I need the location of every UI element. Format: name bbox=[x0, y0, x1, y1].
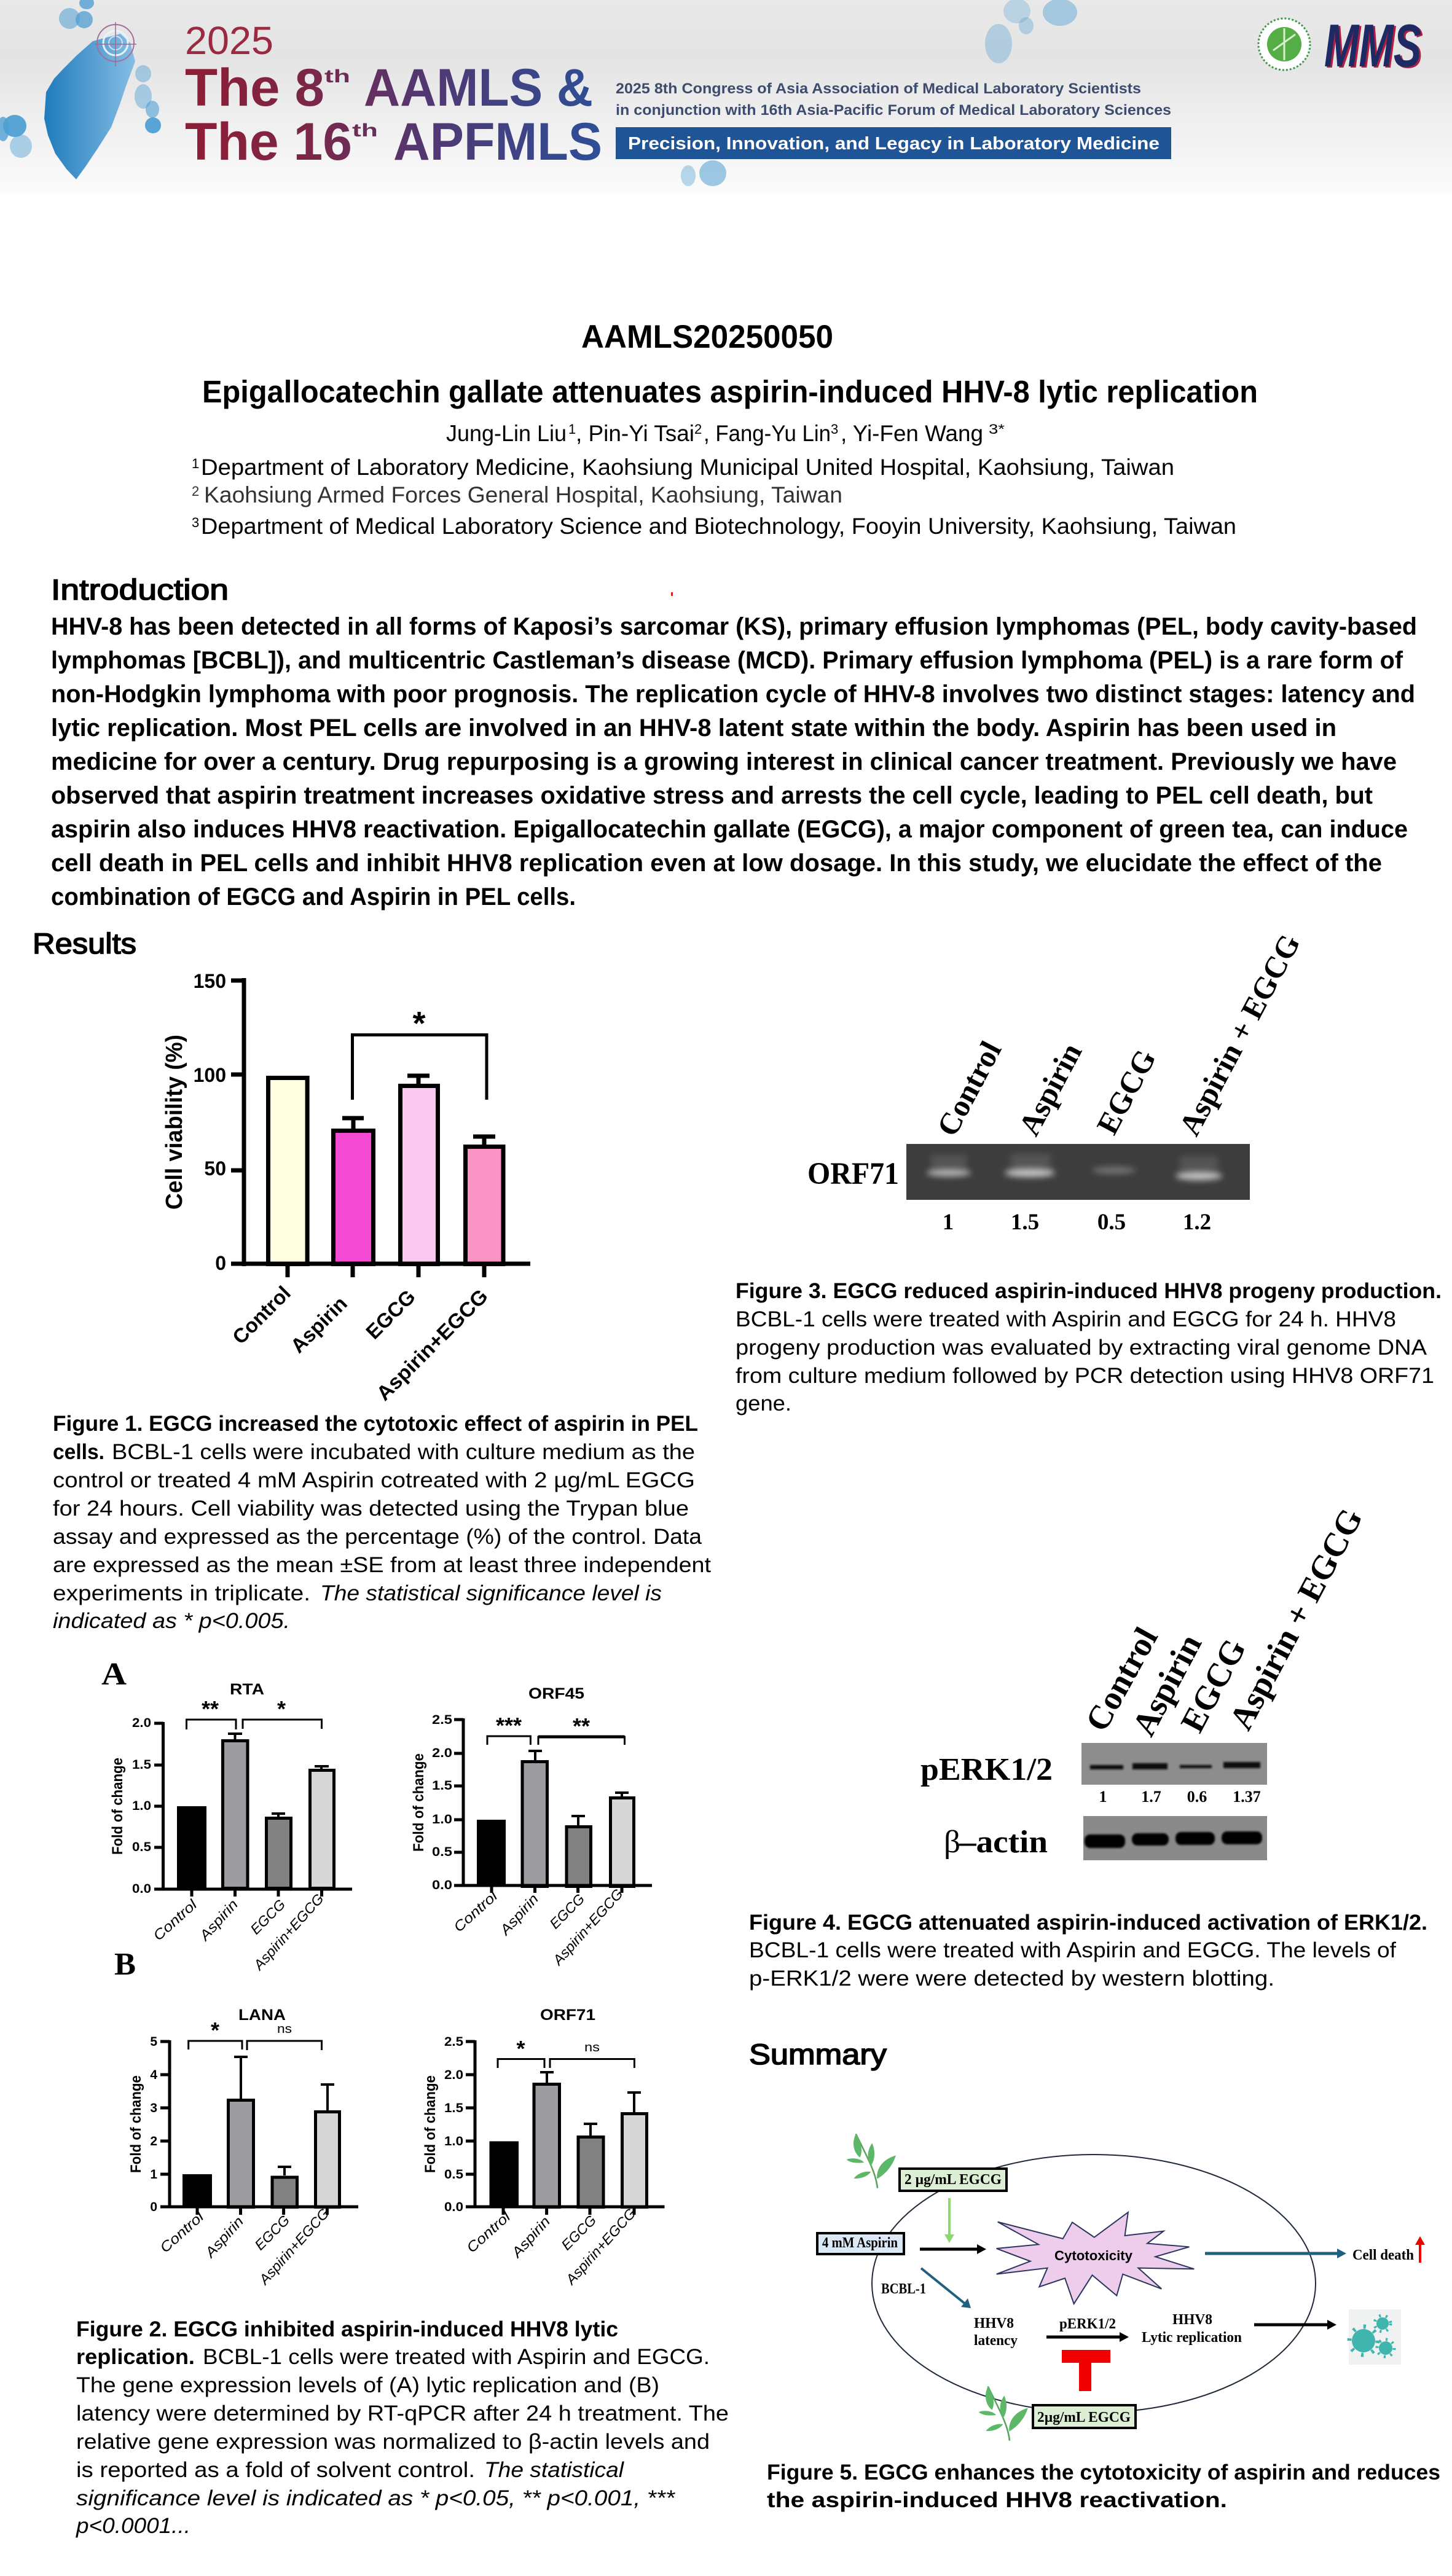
chart: ORF45: Aspirin bbox=[496, 1890, 541, 1939]
lane labels: EGCG bbox=[1173, 1632, 1253, 1738]
theme bar: Precision, Innovation, and Legacy in Laboratory Medicine bbox=[628, 134, 1160, 154]
chart: ORF45: Fold of change bbox=[410, 1753, 427, 1852]
inhibition symbol bbox=[1062, 2350, 1110, 2391]
chart: LANA: 0 bbox=[150, 2200, 157, 2214]
heading line two bbox=[185, 112, 602, 171]
figure 3 caption: from culture medium followed by PCR detection using HHV8 ORF71 bbox=[736, 1364, 1434, 1388]
authors bbox=[446, 421, 1005, 446]
chart: ORF71: 2.0 bbox=[444, 2068, 463, 2082]
chart: ORF71: EGCG bbox=[558, 2212, 599, 2253]
chart: ORF71: 1.0 bbox=[444, 2134, 463, 2148]
figure 3 gel bbox=[807, 928, 1307, 1235]
figure 2 caption bbox=[76, 2317, 729, 2538]
x labels: Control bbox=[228, 1282, 295, 1349]
icon: virions bbox=[1349, 2309, 1401, 2365]
chart: LANA: Fold of change bbox=[128, 2075, 144, 2173]
authors: , Fang-Yu Lin bbox=[704, 421, 831, 446]
lane labels: Aspirin + EGCG bbox=[1172, 928, 1307, 1141]
chart: ORF45: ORF45 bbox=[528, 1685, 584, 1702]
introduction text: combination of EGCG and Aspirin in PEL cells. bbox=[51, 883, 576, 910]
densitometry values: 1.7 bbox=[1141, 1788, 1161, 1806]
authors: 3* bbox=[989, 421, 1005, 437]
chart: RTA: Aspirin+EGCG bbox=[249, 1890, 327, 1974]
figure 2 caption: latency were determined by RT-qPCR after 24 h treatment. The bbox=[76, 2402, 729, 2425]
authors: , Yi-Fen Wang bbox=[841, 421, 983, 446]
introduction text: HHV-8 has been detected in all forms of Kaposi’s sarcomar (KS), primary effusion lymphomas (PEL, body cavity-based bbox=[51, 613, 1417, 640]
figure 1 caption: experiments in triplicate. bbox=[53, 1581, 310, 1605]
box: EGCG dose bottom: 2µg/mL EGCG bbox=[1037, 2410, 1131, 2425]
chart: ORF71: Control bbox=[463, 2208, 514, 2256]
chart: ORF71: 1.5 bbox=[444, 2101, 463, 2115]
figure 1 caption: are expressed as the mean ±SE from at least three independent bbox=[53, 1553, 711, 1577]
significance bracket bbox=[353, 1035, 487, 1100]
lane labels: Control bbox=[930, 1035, 1008, 1141]
x labels: EGCG bbox=[361, 1285, 420, 1344]
lane labels: Control bbox=[1078, 1621, 1165, 1737]
chart: ORF45: Aspirin+EGCG bbox=[549, 1885, 626, 1969]
lane labels bbox=[1078, 1502, 1370, 1742]
introduction text: observed that aspirin treatment increases oxidative stress and arrests the cell cycle, leading to PEL cell death, but bbox=[51, 782, 1373, 809]
heading line two: th bbox=[352, 120, 378, 141]
arrow: latency to lytic replication bbox=[1046, 2332, 1129, 2342]
icon: red up arrow bbox=[1415, 2236, 1425, 2263]
chart: LANA: LANA bbox=[238, 2006, 286, 2024]
figure 3 caption bbox=[736, 1279, 1442, 1415]
figure 3 caption: gene. bbox=[736, 1392, 791, 1415]
heading line two: The 16 bbox=[185, 112, 352, 171]
chart: ORF71: ORF71 bbox=[540, 2006, 595, 2024]
y tick labels: 100 bbox=[194, 1064, 226, 1086]
heading line one: th bbox=[324, 66, 350, 87]
summary heading: Summary bbox=[749, 2038, 887, 2070]
chart: LANA: * bbox=[211, 2018, 219, 2043]
introduction text: aspirin also induces HHV8 reactivation. Epigallocatechin gallate (EGCG), a major component of green tea, can induce bbox=[51, 816, 1408, 843]
affiliations bbox=[192, 455, 1236, 539]
cell outline bbox=[872, 2155, 1316, 2413]
chart: RTA: * bbox=[277, 1696, 286, 1721]
chart: ORF45: 0.0 bbox=[432, 1878, 452, 1892]
introduction text: medicine for over a century. Drug repurposing is a growing interest in clinical cancer treatment. Previously we have bbox=[51, 748, 1397, 775]
chart: ORF45: 1.0 bbox=[432, 1812, 452, 1826]
chart: RTA: Aspirin bbox=[195, 1896, 241, 1944]
pERK blot bbox=[1081, 1743, 1267, 1785]
chart: ORF71: 0.5 bbox=[444, 2167, 463, 2182]
figure 2 caption: relative gene expression was normalized to β-actin levels and bbox=[76, 2430, 710, 2454]
figure 1 caption: indicated as * p<0.005. bbox=[53, 1609, 290, 1633]
abstract number: AAMLS20250050 bbox=[581, 319, 833, 355]
target rings bbox=[95, 22, 136, 66]
box: aspirin dose: 4 mM Aspirin bbox=[822, 2235, 898, 2251]
chart: LANA: 5 bbox=[150, 2035, 157, 2049]
authors: 3 bbox=[831, 421, 838, 437]
conference banner bbox=[0, 0, 1452, 192]
chart: RTA: 0.5 bbox=[132, 1840, 151, 1854]
logo: society seal bbox=[1258, 18, 1310, 70]
densitometry values: 1 bbox=[943, 1210, 954, 1235]
figure 5 summary diagram bbox=[817, 2134, 1425, 2441]
chart: LANA: 1 bbox=[150, 2167, 157, 2182]
gene label: ORF71 bbox=[807, 1157, 899, 1191]
map of Taiwan bbox=[44, 34, 135, 179]
starburst: cytotoxicity bbox=[997, 2212, 1194, 2304]
congress subtitle: in conjunction with 16th Asia-Pacific Forum of Medical Laboratory Sciences bbox=[616, 102, 1171, 119]
chart: ORF71: Aspirin+EGCG bbox=[562, 2205, 639, 2288]
chart: RTA: 0.0 bbox=[132, 1882, 151, 1896]
arrow: cytotoxicity to cell death bbox=[1205, 2249, 1346, 2258]
chart: RTA: RTA bbox=[230, 1681, 264, 1698]
chart: LANA: 4 bbox=[150, 2068, 157, 2082]
densitometry values: 1.5 bbox=[1011, 1210, 1039, 1235]
x labels: Aspirin+EGCG bbox=[372, 1285, 492, 1405]
diagram labels: BCBL-1 bbox=[881, 2281, 926, 2297]
chart: ORF71 bbox=[422, 2006, 665, 2288]
figure 2 caption: Figure 2. EGCG inhibited aspirin-induced HHV8 lytic bbox=[76, 2317, 618, 2341]
chart: LANA: Control bbox=[157, 2208, 207, 2256]
figure 2 caption: The gene expression levels of (A) lytic replication and (B) bbox=[76, 2373, 659, 2397]
chart: RTA bbox=[109, 1681, 352, 1974]
arrow: aspirin to latency bbox=[921, 2268, 971, 2308]
x labels bbox=[228, 1282, 492, 1405]
icon: tea leaves top bbox=[847, 2134, 896, 2188]
chart: RTA: 2.0 bbox=[132, 1716, 151, 1730]
icon: tea leaves bottom bbox=[979, 2386, 1028, 2441]
congress subtitle bbox=[616, 80, 1171, 119]
figure 4 caption bbox=[749, 1911, 1427, 1991]
gel image bbox=[906, 1144, 1250, 1200]
figure 2 caption: The statistical bbox=[484, 2458, 624, 2482]
chart: ORF71: 2.5 bbox=[444, 2035, 463, 2049]
figure 3 caption: BCBL-1 cells were treated with Aspirin and EGCG for 24 h. HHV8 bbox=[736, 1307, 1396, 1331]
figure 1 caption: control or treated 4 mM Aspirin cotreated with 2 µg/mL EGCG bbox=[53, 1468, 695, 1492]
densitometry values: 1.37 bbox=[1233, 1788, 1261, 1806]
chart: RTA: EGCG bbox=[247, 1896, 288, 1938]
introduction heading: Introduction bbox=[51, 573, 229, 606]
chart: ORF45: Control bbox=[450, 1887, 501, 1935]
panel label B: B bbox=[114, 1947, 136, 1982]
figure 5 caption: the aspirin-induced HHV8 reactivation. bbox=[767, 2488, 1227, 2512]
figure 4 caption: BCBL-1 cells were treated with Aspirin and EGCG. The levels of bbox=[749, 1938, 1396, 1962]
starburst: cytotoxicity: Cytotoxicity bbox=[1054, 2248, 1133, 2263]
figure 1 chart: cell viability: * bbox=[412, 1005, 426, 1042]
authors: , Pin-Yi Tsai bbox=[576, 421, 694, 446]
chart: LANA: 3 bbox=[150, 2101, 157, 2115]
figure 2 caption: replication. bbox=[76, 2345, 195, 2369]
figure 4 western blot: β bbox=[944, 1825, 960, 1860]
figure 2 caption: is reported as a fold of solvent control. bbox=[76, 2458, 475, 2482]
bands bbox=[927, 1167, 1222, 1180]
figure 2 caption: p<0.0001... bbox=[76, 2514, 190, 2538]
chart: ORF71: ns bbox=[584, 2041, 600, 2054]
affiliations: 1 bbox=[192, 456, 199, 471]
y tick labels bbox=[194, 970, 226, 1274]
x labels: Aspirin bbox=[286, 1292, 351, 1357]
box: aspirin dose bbox=[817, 2233, 904, 2254]
box: EGCG dose top bbox=[900, 2169, 1007, 2191]
arrow: EGCG to cytotoxicity bbox=[944, 2198, 954, 2243]
authors: Jung-Lin Liu bbox=[446, 421, 567, 446]
figure 4 western blot: –actin bbox=[959, 1825, 1048, 1860]
figure 4 caption: p-ERK1/2 were were detected by western blotting. bbox=[749, 1967, 1274, 1991]
chart: ORF45: *** bbox=[496, 1713, 522, 1738]
densitometry values: 1.2 bbox=[1183, 1210, 1211, 1235]
introduction text: lymphomas [BCBL]), and multicentric Castleman’s disease (MCD). Primary effusion lymphoma (PEL) is a rare form of bbox=[51, 647, 1403, 674]
poster title: Epigallocatechin gallate attenuates aspirin-induced HHV-8 lytic replication bbox=[202, 374, 1258, 409]
figure 5 caption bbox=[767, 2461, 1440, 2512]
heading line two: APFMLS bbox=[393, 112, 602, 171]
chart: RTA: 1.5 bbox=[132, 1758, 151, 1772]
decorative molecules bbox=[0, 0, 1077, 186]
y tick labels: 0 bbox=[215, 1252, 226, 1274]
chart: LANA: Aspirin bbox=[201, 2213, 246, 2261]
heading line one: The 8 bbox=[185, 58, 324, 117]
diagram labels: Lytic replication bbox=[1142, 2330, 1242, 2346]
chart: ORF71: * bbox=[516, 2036, 525, 2061]
theme bar bbox=[616, 127, 1171, 159]
arrow: lytic replication to virions bbox=[1254, 2320, 1336, 2330]
lane labels bbox=[930, 928, 1307, 1141]
axes bbox=[231, 978, 530, 1277]
chart: ORF45 bbox=[410, 1685, 652, 1969]
box: EGCG dose top: 2 µg/mL EGCG bbox=[905, 2172, 1002, 2188]
y tick labels: 50 bbox=[204, 1157, 226, 1180]
chart: RTA: Control bbox=[150, 1896, 200, 1944]
authors: 2 bbox=[694, 421, 702, 437]
chart: ORF71: Aspirin bbox=[508, 2213, 553, 2261]
figure 1 caption bbox=[53, 1412, 711, 1633]
chart: RTA: 1.0 bbox=[132, 1799, 151, 1813]
affiliations: Department of Medical Laboratory Science and Biotechnology, Fooyin University, Kaohsiung, Taiwan bbox=[201, 514, 1236, 539]
introduction text: non-Hodgkin lymphoma with poor prognosis. The replication cycle of HHV-8 involves two distinct stages: latency and bbox=[51, 681, 1415, 708]
y axis title: Cell viability (%) bbox=[162, 1035, 187, 1210]
chart: LANA: ns bbox=[277, 2022, 292, 2036]
chart: LANA: Aspirin+EGCG bbox=[255, 2205, 332, 2288]
results heading: Results bbox=[33, 927, 136, 960]
densitometry values: 0.5 bbox=[1097, 1210, 1126, 1235]
chart: ORF45: 2.0 bbox=[432, 1746, 452, 1760]
densitometry values: 1 bbox=[1099, 1788, 1107, 1806]
chart: RTA: ** bbox=[202, 1696, 219, 1721]
figure 1 caption: assay and expressed as the percentage (%) of the control. Data bbox=[53, 1525, 702, 1549]
lane labels: EGCG bbox=[1089, 1044, 1163, 1140]
heading line one bbox=[185, 58, 593, 117]
figure 2 caption: BCBL-1 cells were treated with Aspirin and EGCG. bbox=[203, 2345, 710, 2369]
chart: ORF45: ** bbox=[573, 1713, 590, 1739]
figure 3 caption: progeny production was evaluated by extracting viral genome DNA bbox=[736, 1336, 1427, 1360]
chart: LANA bbox=[128, 2006, 358, 2288]
panel label A: A bbox=[101, 1657, 127, 1692]
chart: ORF71: 0.0 bbox=[444, 2200, 463, 2214]
diagram labels: HHV8 bbox=[1172, 2312, 1212, 2328]
lane labels: Aspirin bbox=[1124, 1628, 1209, 1742]
figure 1 caption: The statistical significance level is bbox=[320, 1581, 662, 1605]
figure 1 caption: cells. bbox=[53, 1440, 104, 1464]
introduction text: cell death in PEL cells and inhibit HHV8 replication even at low dosage. In this study, we elucidate the effect of the bbox=[51, 850, 1382, 877]
bars bbox=[268, 1078, 503, 1264]
y tick labels: 150 bbox=[194, 970, 226, 992]
affiliations: 3 bbox=[192, 515, 199, 530]
diagram labels: Cell death bbox=[1352, 2247, 1414, 2263]
figure 3 caption: Figure 3. EGCG reduced aspirin-induced HHV8 progeny production. bbox=[736, 1279, 1442, 1303]
year: 2025 bbox=[185, 18, 273, 63]
chart: ORF45: 2.5 bbox=[432, 1713, 452, 1727]
introduction text: lytic replication. Most PEL cells are involved in an HHV-8 latent state within the body. Aspirin has been used in bbox=[51, 714, 1336, 742]
lane labels: Aspirin + EGCG bbox=[1222, 1502, 1370, 1736]
box: EGCG dose bottom bbox=[1033, 2405, 1136, 2428]
diagram labels: pERK1/2 bbox=[1059, 2316, 1116, 2332]
affiliations: Kaohsiung Armed Forces General Hospital, Kaohsiung, Taiwan bbox=[204, 482, 842, 507]
chart: ORF45: EGCG bbox=[546, 1890, 587, 1932]
diagram labels bbox=[881, 2247, 1414, 2349]
chart: LANA: 2 bbox=[150, 2134, 157, 2148]
chart: ORF45: 1.5 bbox=[432, 1779, 452, 1793]
error bars bbox=[342, 1076, 495, 1145]
authors: 1 bbox=[568, 421, 576, 437]
diagram labels: HHV8 bbox=[974, 2316, 1014, 2331]
introduction text bbox=[51, 613, 1417, 910]
figure 5 caption: Figure 5. EGCG enhances the cytotoxicity of aspirin and reduces bbox=[767, 2461, 1440, 2484]
blot labels: pERK1/2 bbox=[920, 1752, 1053, 1787]
figure 1 caption: BCBL-1 cells were incubated with culture medium as the bbox=[112, 1440, 695, 1464]
red speck bbox=[671, 592, 673, 596]
densitometry values bbox=[943, 1210, 1211, 1235]
chart: ORF45: 0.5 bbox=[432, 1845, 452, 1859]
affiliations: Department of Laboratory Medicine, Kaohsiung Municipal United Hospital, Kaohsiung, Taiwan bbox=[201, 455, 1174, 480]
chart: ORF71: Fold of change bbox=[422, 2075, 439, 2173]
chart: LANA: EGCG bbox=[251, 2212, 292, 2253]
heading line one: AAMLS & bbox=[364, 58, 593, 117]
densitometry values bbox=[1099, 1788, 1261, 1806]
densitometry values: 0.6 bbox=[1187, 1788, 1207, 1806]
figure 4 western blot bbox=[920, 1502, 1370, 1860]
diagram labels: latency bbox=[974, 2333, 1018, 2349]
figure 4 caption: Figure 4. EGCG attenuated aspirin-induced activation of ERK1/2. bbox=[749, 1911, 1427, 1935]
actin blot bbox=[1083, 1816, 1267, 1860]
congress subtitle: 2025 8th Congress of Asia Association of Medical Laboratory Scientists bbox=[616, 80, 1141, 97]
figure 2 caption: significance level is indicated as * p<0.05, ** p<0.001, *** bbox=[76, 2486, 676, 2510]
figure 1 caption: Figure 1. EGCG increased the cytotoxic effect of aspirin in PEL bbox=[53, 1412, 698, 1436]
figure 1 chart: cell viability bbox=[162, 970, 530, 1405]
chart: RTA: Fold of change bbox=[109, 1758, 126, 1855]
figure 1 caption: for 24 hours. Cell viability was detected using the Trypan blue bbox=[53, 1497, 689, 1521]
arrow: aspirin to cytotoxicity bbox=[920, 2244, 986, 2254]
affiliations: 2 bbox=[192, 483, 199, 499]
lane labels: Aspirin bbox=[1011, 1037, 1088, 1141]
